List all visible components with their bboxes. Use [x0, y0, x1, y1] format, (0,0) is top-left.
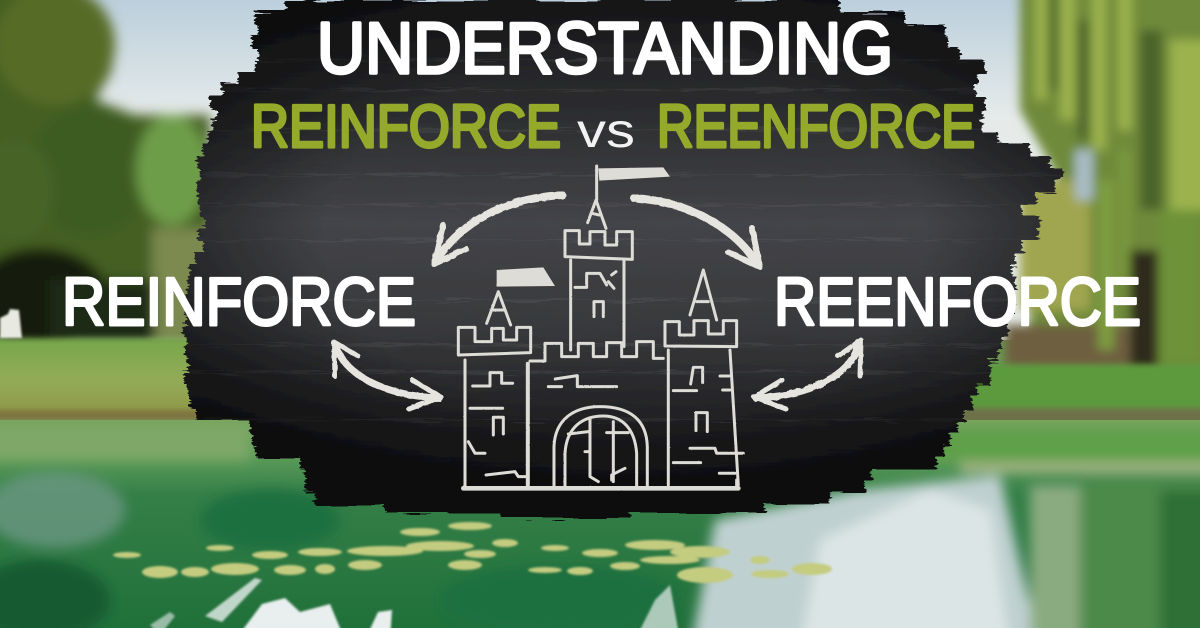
- lily pads: [113, 522, 832, 583]
- sky: [0, 0, 1200, 340]
- grass banks: [0, 338, 1200, 428]
- left label: REINFORCE: REINFORCE: [62, 264, 416, 340]
- icon: right tower: [665, 270, 743, 485]
- castle chalk drawing: [458, 166, 743, 488]
- heading: REINFORCE vs REENFORCE: REINFORCE: [251, 93, 561, 160]
- icon: centre keep battlements and gate: [463, 342, 738, 488]
- arrow: lower right double-headed: [754, 340, 861, 409]
- title: UNDERSTANDING: UNDERSTANDING: [317, 9, 893, 89]
- arrow: lower left double-headed: [334, 342, 441, 409]
- heading: REINFORCE vs REENFORCE: [251, 93, 975, 160]
- sky reflections on the water: [150, 578, 680, 628]
- arrow: top right curved: [634, 198, 760, 267]
- icon: left tower with flag: [458, 267, 555, 488]
- chalkboard brush-stroke panel: [62, 0, 1141, 530]
- white garden statue: [0, 309, 22, 338]
- heading: REINFORCE vs REENFORCE: REENFORCE: [657, 93, 975, 160]
- arrow: top left curved: [434, 195, 562, 264]
- right label: REENFORCE: REENFORCE: [774, 264, 1141, 340]
- brush streak texture: [180, 60, 1060, 420]
- icon: centre tower with flag: [565, 166, 670, 350]
- trees on the left: [0, 0, 217, 352]
- pond water: [0, 420, 1200, 628]
- willow tree on the right: [1005, 0, 1200, 370]
- heading: REINFORCE vs REENFORCE: vs: [577, 105, 635, 158]
